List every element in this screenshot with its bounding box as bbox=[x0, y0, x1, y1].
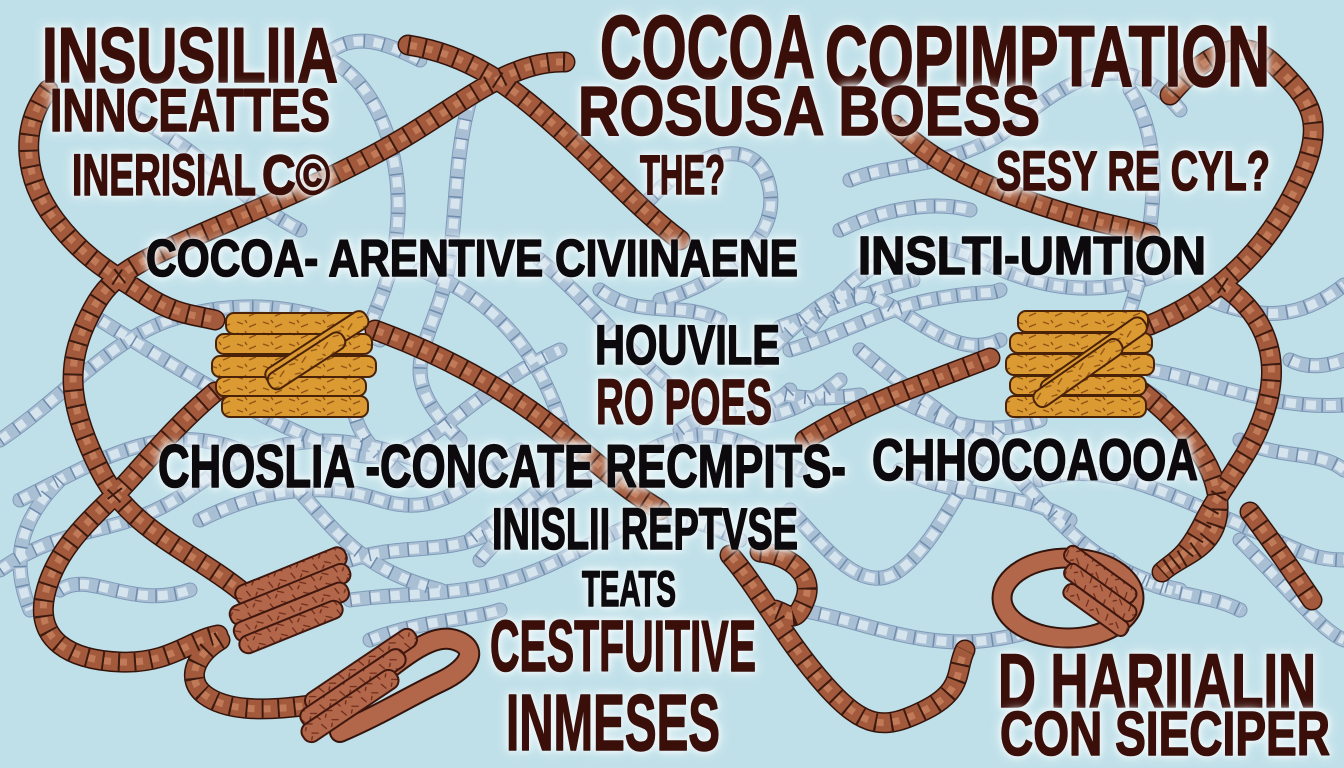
icon: brown bundle lower left bbox=[227, 545, 353, 656]
label: teats: TEATS bbox=[582, 561, 676, 617]
heading: left title bbox=[42, 11, 338, 144]
heading: left title: INNCEATTES bbox=[50, 77, 330, 144]
label: bottom right title bbox=[998, 639, 1330, 768]
heading: main title: ROSUSA BOESS bbox=[578, 72, 1040, 150]
label: chocoaooa: CHHOCOAOOA bbox=[872, 428, 1198, 493]
label: the: THE? bbox=[640, 143, 725, 206]
label: cestfuitive: CESTFUITIVE bbox=[490, 607, 756, 687]
label: inerisial: INERISIAL bbox=[72, 143, 256, 208]
heading: main title bbox=[578, 0, 1270, 150]
label: insulin reptvse: INISLII REPTVSE bbox=[492, 497, 798, 562]
icon: brown loop bundle right bbox=[1002, 543, 1139, 639]
label: inmeses: INMESES bbox=[506, 678, 720, 767]
label: cocoa arentive: COCOA- ARENTIVE CIVIINAENE bbox=[146, 230, 798, 288]
heading: left title: INSUSILIIA bbox=[42, 11, 338, 99]
heading: main title: COCOA bbox=[600, 0, 815, 98]
label: houvile: HOUVILE bbox=[595, 313, 780, 376]
label: ropes: RO POES bbox=[596, 366, 772, 438]
icon: orange bundle left bbox=[212, 308, 376, 417]
icon: brown loop bundle bottom bbox=[297, 625, 469, 746]
label: insulin umtion: INSLTI-UMTION bbox=[858, 226, 1206, 286]
label: choslia concate recmpits: CHOSLIA -CONCATE RECMPITS- bbox=[158, 433, 846, 500]
blue-grey rope network bbox=[0, 41, 1344, 642]
icon: orange bundle right bbox=[1006, 311, 1154, 417]
label: inline C: C© bbox=[262, 143, 330, 206]
